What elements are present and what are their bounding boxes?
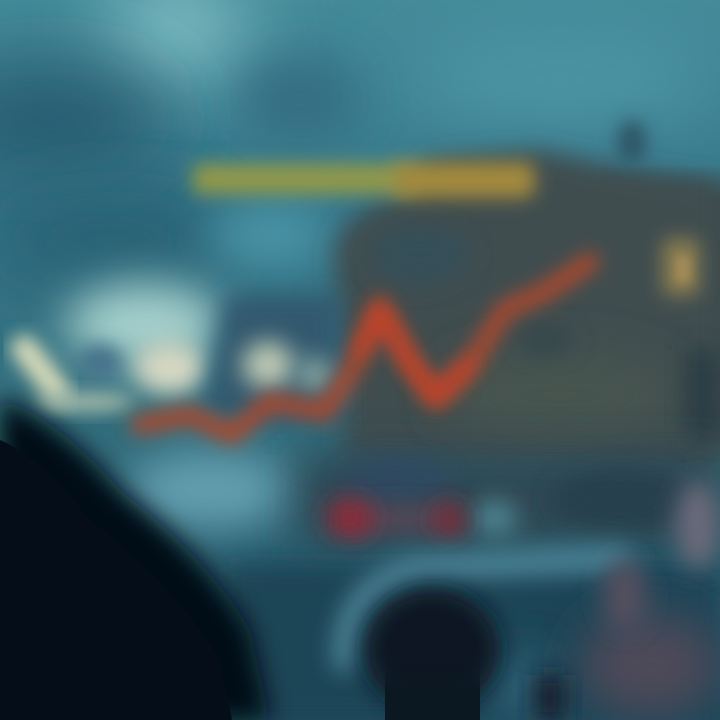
- red car: [326, 458, 466, 538]
- dashboard of the car: [230, 558, 720, 720]
- street level: [125, 450, 720, 545]
- lit window: [662, 238, 700, 296]
- large building: [335, 120, 720, 470]
- bright clouds at horizon: [24, 283, 225, 412]
- pinkish hand at the right: [535, 481, 720, 720]
- yellow highlight bar: [192, 162, 535, 198]
- dark silhouette foreground: [0, 398, 270, 720]
- small blue building: [205, 295, 345, 420]
- dark head silhouette: [364, 588, 500, 720]
- red line chart: [140, 262, 590, 435]
